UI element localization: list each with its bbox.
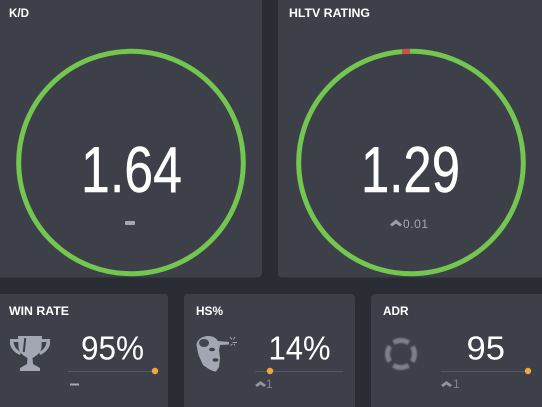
gauge marker (402, 49, 410, 54)
change: K/D (125, 221, 135, 225)
heading: K/D: K/D (9, 6, 29, 20)
icon: trophy (10, 336, 50, 371)
heading: win rate: WIN RATE (9, 304, 69, 318)
value: win rate: 95% (81, 330, 144, 366)
change: HS% (255, 377, 273, 391)
change: ADR: 1 (453, 377, 460, 391)
change: ADR (441, 377, 460, 391)
gauge ring: HLTV rating (299, 51, 523, 274)
slider: HS% (255, 368, 343, 374)
panel: HLTV rating (278, 0, 542, 278)
change: win rate (70, 384, 79, 386)
value: K/D: 1.64 (81, 133, 182, 206)
gauge ring: K/D (19, 51, 243, 274)
panel: K/D (0, 0, 262, 278)
heading: HS%: HS% (196, 304, 223, 318)
value: HS%: 14% (268, 330, 330, 366)
change: HS%: 1 (266, 377, 273, 391)
heading: ADR: ADR (383, 304, 409, 318)
heading: HLTV rating: HLTV RATING (289, 6, 370, 20)
panel: ADR (371, 294, 542, 407)
panel: win rate (0, 294, 168, 407)
icon: head with headshot (196, 336, 237, 372)
value: HLTV rating: 1.29 (361, 133, 460, 206)
slider: win rate (68, 368, 158, 374)
change: HLTV rating (390, 217, 428, 231)
value: ADR: 95 (466, 330, 505, 366)
slider: ADR (441, 368, 531, 374)
panel: HS% (184, 294, 355, 407)
icon: ring (388, 340, 414, 368)
change: HLTV rating: 0.01 (403, 217, 428, 231)
